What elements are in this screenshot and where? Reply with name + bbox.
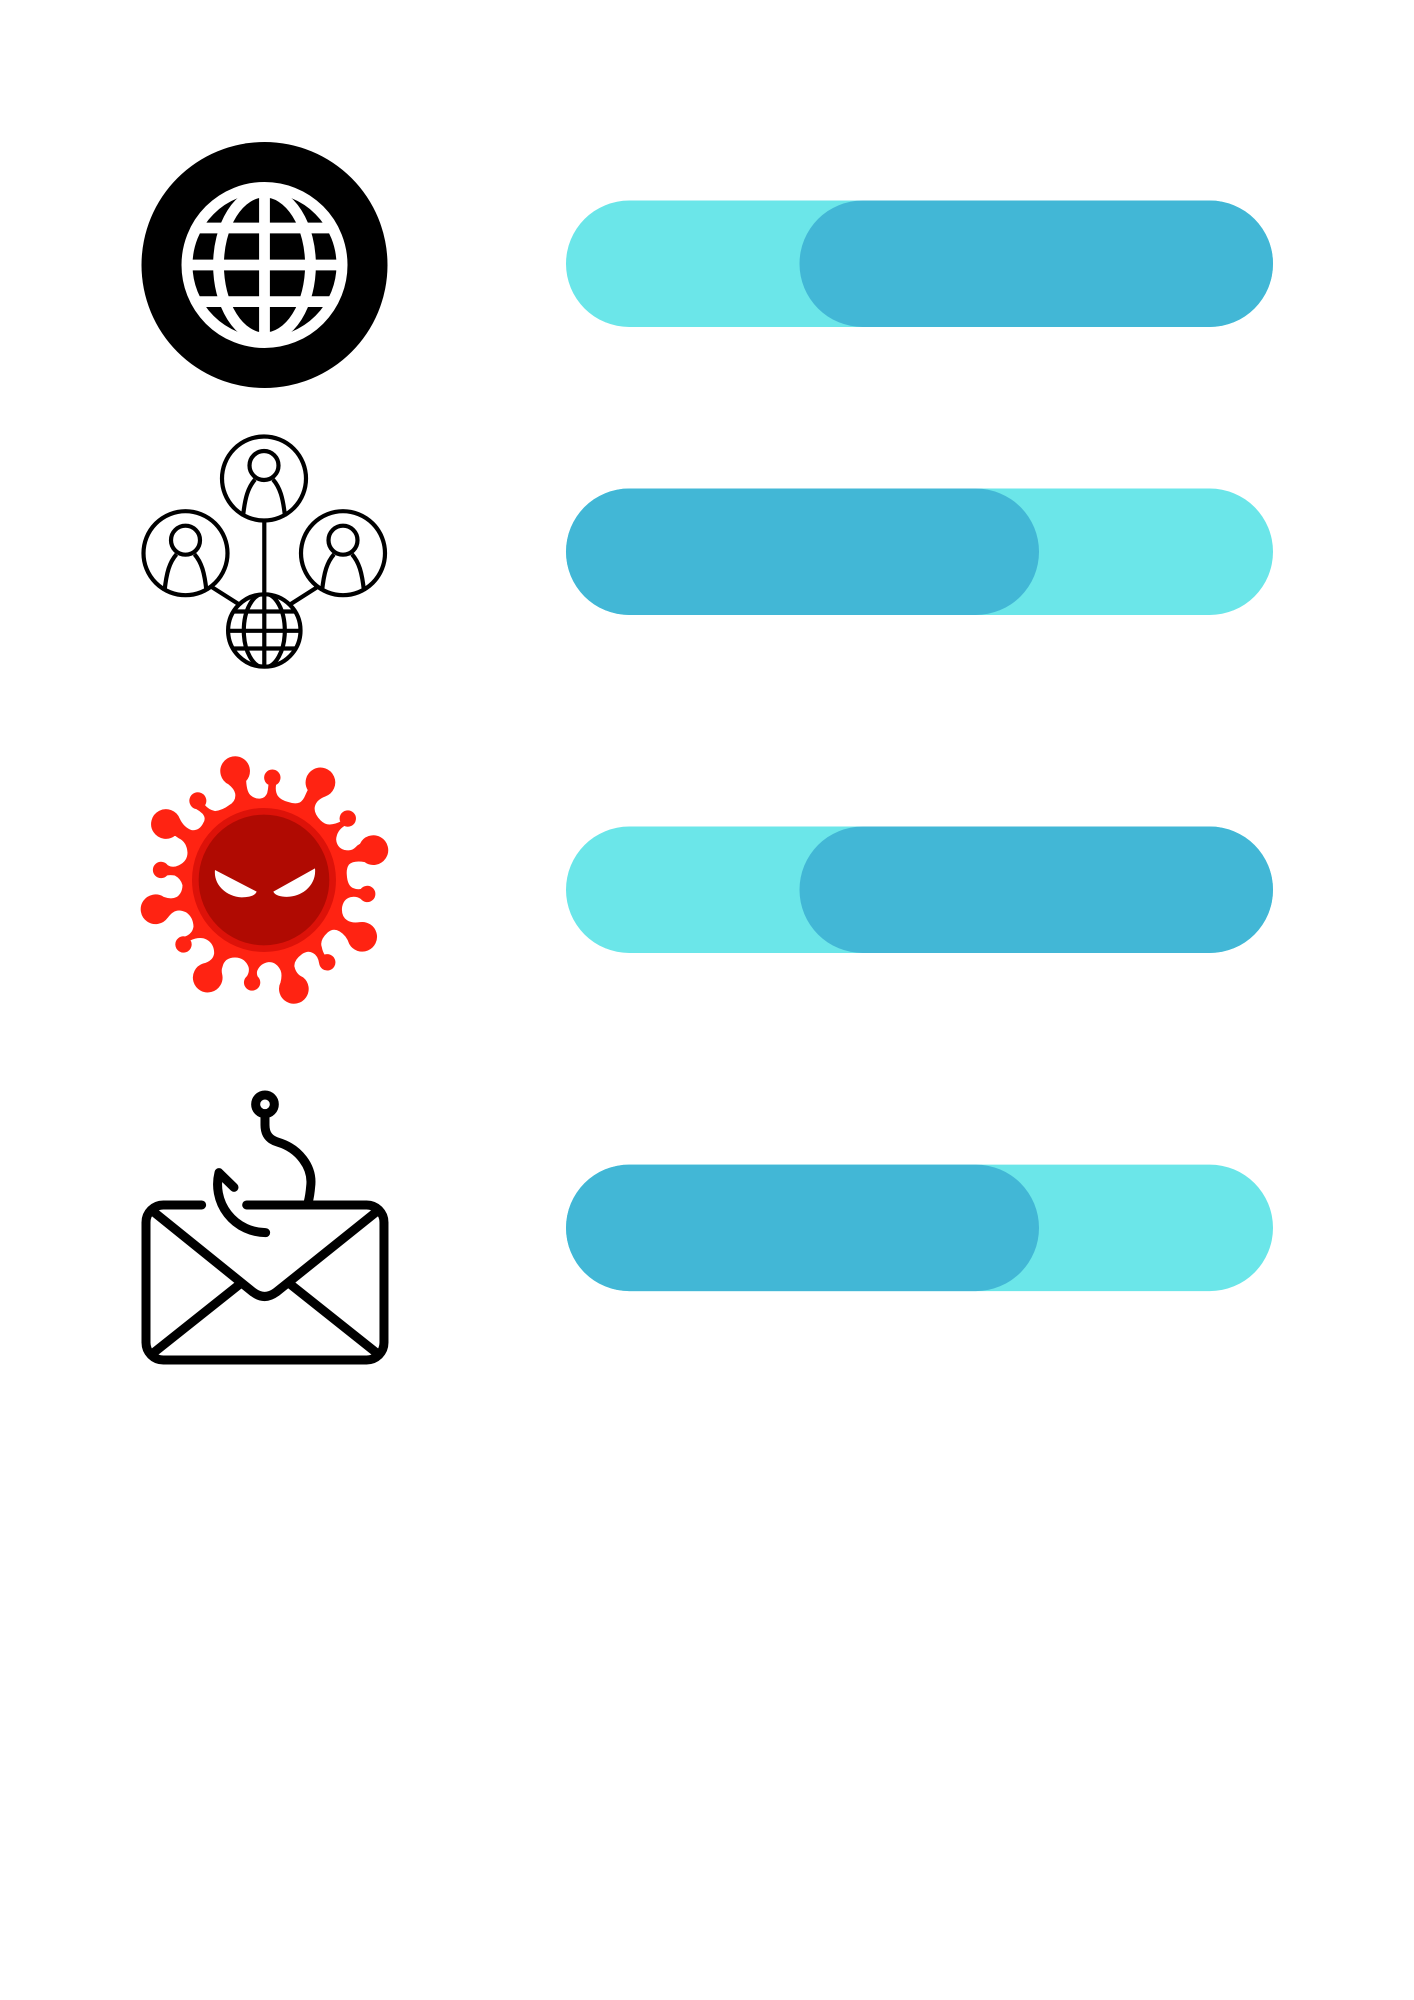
virus body (192, 808, 336, 952)
icon: globe in black circle (142, 142, 388, 388)
person: right (301, 511, 385, 595)
bar: row 4 (566, 1165, 1273, 1291)
bar: row 3 (566, 826, 1273, 953)
virus eyes (215, 868, 315, 897)
envelope (146, 1205, 384, 1360)
fish hook (256, 1095, 274, 1114)
icon: phishing hook and envelope (146, 1095, 384, 1360)
icon: red virus (142, 757, 387, 1003)
icon: people connected to globe (144, 436, 385, 668)
person: left (144, 511, 228, 595)
bar: row 2 (566, 488, 1273, 615)
bar: row 1 (566, 200, 1273, 327)
person: top (222, 436, 306, 520)
small globe (226, 594, 302, 668)
connector lines (212, 522, 317, 668)
